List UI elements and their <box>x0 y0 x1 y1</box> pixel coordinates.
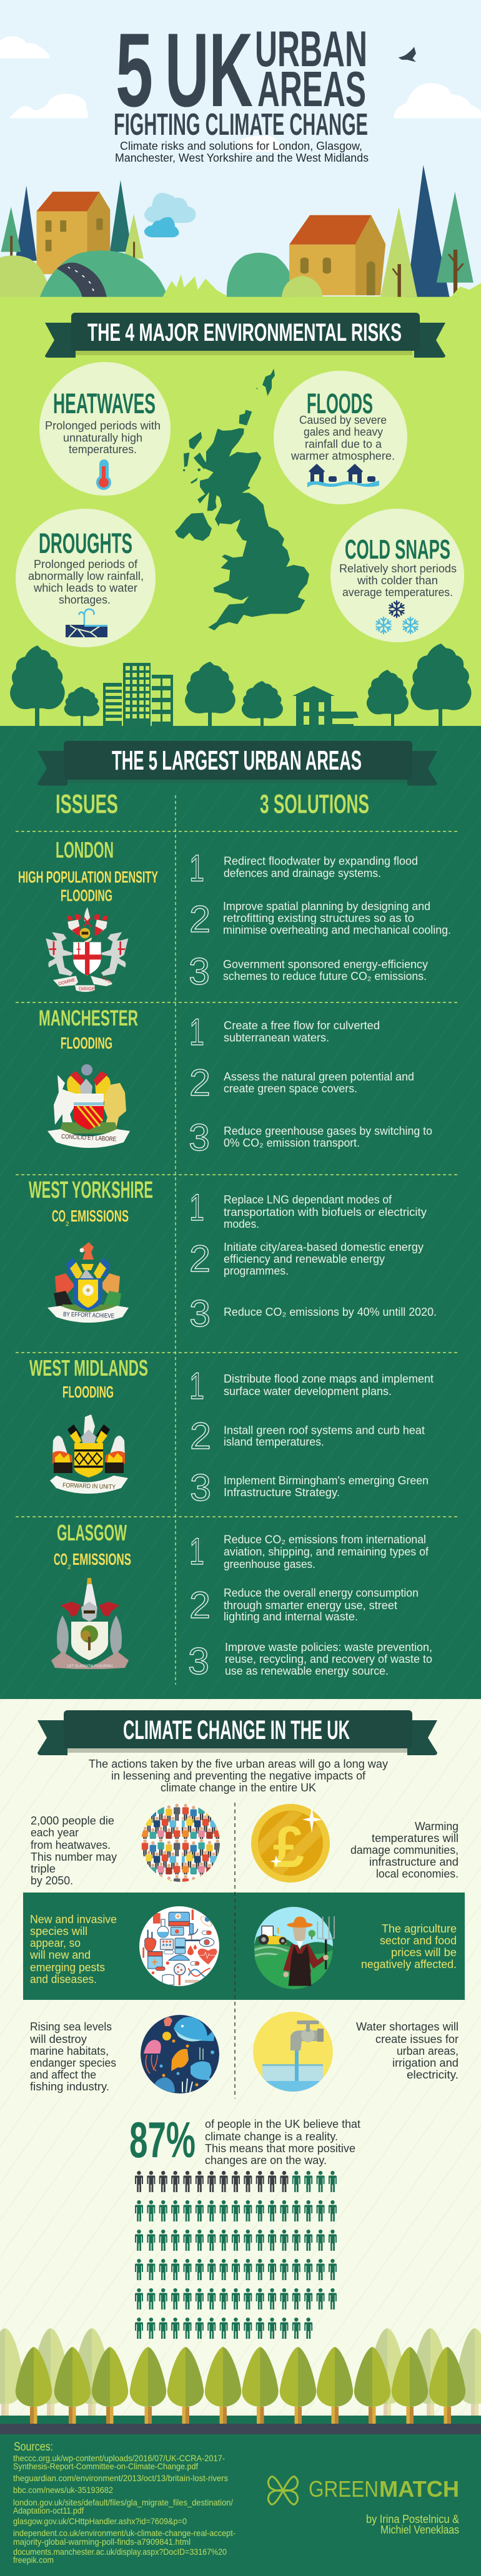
solution 3: West Yorkshire: Reduce CO₂ emissions by 40% untill 2020. <box>224 1306 437 1318</box>
issues: London <box>18 868 158 905</box>
icon: water tap circle <box>253 2012 333 2094</box>
solution 3: West Yorkshire <box>189 1293 437 1335</box>
issue: Manchester: FLOODING <box>61 1034 112 1052</box>
solution 3: West Midlands <box>190 1467 429 1509</box>
issue: Glasgow: EMISSIONS <box>72 1550 131 1569</box>
crest: City of London coat of arms: DIRIGE <box>79 986 95 992</box>
solution 2: West Midlands: island temperatures. <box>224 1436 324 1448</box>
sources list: Synthesis-Report-Committee-on-Climate-Change.pdf <box>13 2461 198 2471</box>
text: rising sea levels: fishing industry. <box>30 2080 109 2093</box>
crest: West Yorkshire coat of arms <box>47 1242 129 1323</box>
solution 1: West Yorkshire: Replace LNG dependant modes of <box>224 1193 392 1206</box>
crest: City of London coat of arms: DOMINE <box>58 977 76 987</box>
icon: flooded houses <box>307 464 379 487</box>
solution 2: London: 2 <box>189 898 211 940</box>
solution 3: London <box>189 951 428 992</box>
text: warming temperatures: temperatures will <box>372 1832 459 1844</box>
text: introduction: The actions taken by the five urban areas will go a long way <box>89 1758 388 1770</box>
solution 2: London: minimise overheating and mechanical cooling. <box>223 924 451 936</box>
solution 1: West Midlands <box>189 1365 434 1407</box>
solution 2: Glasgow: 2 <box>189 1584 211 1626</box>
text: heatwave deaths: from heatwaves. <box>31 1839 111 1851</box>
solution 1: West Yorkshire: transportation with biofuels or electricity <box>224 1206 427 1218</box>
icon: thermometer <box>96 459 111 490</box>
crest: West Yorkshire coat of arms: BY EFFORT ACHIEVE <box>63 1311 115 1320</box>
text: heatwave deaths: 2,000 people die <box>31 1814 114 1827</box>
issue: Glasgow: CO <box>54 1550 67 1569</box>
issue: West Yorkshire: 2 <box>66 1221 69 1228</box>
solution 2: Manchester: Assess the natural green potential and <box>224 1070 414 1083</box>
heading: West Yorkshire: WEST YORKSHIRE <box>29 1177 153 1203</box>
issue: West Yorkshire: CO <box>52 1207 66 1225</box>
text: floods description: gales and heavy <box>304 426 383 438</box>
text: agriculture: The agriculture <box>382 1922 457 1935</box>
solution 1: West Midlands: Distribute flood zone maps and implement <box>224 1373 434 1385</box>
crest: West Midlands coat of arms <box>50 1414 128 1494</box>
ground strip <box>0 2416 481 2424</box>
text: droughts description <box>28 558 144 606</box>
solution 1: Manchester: subterranean waters. <box>224 1032 329 1044</box>
panel: floods <box>274 371 407 504</box>
solution 2: Glasgow: Reduce the overall energy consumption <box>224 1587 419 1599</box>
banner: climate change in the UK <box>37 1710 437 1755</box>
text: floods description: warmer atmosphere. <box>290 449 395 462</box>
solution 3: Glasgow <box>188 1640 432 1682</box>
solution 3: Manchester: Reduce greenhouse gases by switching to <box>224 1125 432 1137</box>
text: floods description: rainfall due to a <box>305 438 382 451</box>
issue: West Yorkshire: EMISSIONS <box>71 1207 129 1225</box>
text: invasive species: emerging pests <box>30 1961 105 1974</box>
text: rising sea levels <box>29 2020 116 2093</box>
issue: West Midlands: FLOODING <box>62 1383 114 1401</box>
subtitle <box>115 140 369 164</box>
background: urban areas section <box>0 726 481 1699</box>
solution 2: Manchester: 2 <box>189 1062 211 1104</box>
text: water shortages: irrigation and <box>392 2057 459 2069</box>
text: water shortages: urban areas, <box>397 2045 459 2057</box>
text: rising sea levels: Rising sea levels <box>30 2020 112 2033</box>
text: warming temperatures: infrastructure and <box>369 1856 459 1868</box>
map of the UK <box>175 369 309 630</box>
text: rising sea levels: marine habitats, <box>30 2045 109 2057</box>
solution 1: West Yorkshire: modes. <box>224 1218 259 1230</box>
icon: pound coin <box>251 1804 331 1883</box>
icon: snowflakes <box>376 601 417 634</box>
solution 3: West Yorkshire: 3 <box>189 1293 211 1335</box>
footer background <box>0 2434 481 2576</box>
solution 2: West Yorkshire <box>189 1238 424 1280</box>
text: introduction: in lessening and preventing the negative impacts of <box>111 1770 366 1782</box>
title <box>114 11 368 142</box>
issue: West Yorkshire <box>52 1207 129 1228</box>
solution 1: Glasgow: aviation, shipping, and remaining types of <box>224 1545 429 1558</box>
solution 2: London <box>189 898 451 940</box>
solution 1: West Midlands: 1 <box>189 1365 204 1407</box>
issues: London: FLOODING <box>61 886 112 905</box>
text: heatwaves description: Prolonged periods with <box>45 419 161 432</box>
credits: Michiel Veneklaas <box>380 2524 459 2536</box>
text: cold snaps description <box>339 562 457 599</box>
icon: marine life circle <box>141 2015 219 2094</box>
sources list: freepik.com <box>13 2555 54 2565</box>
text: agriculture: sector and food <box>380 1934 457 1947</box>
crest: West Midlands coat of arms: FORWARD IN UNITY <box>62 1482 116 1491</box>
solution 2: London: Improve spatial planning by designing and <box>223 900 430 913</box>
solution 2: West Yorkshire: Initiate city/area-based domestic energy <box>224 1241 424 1253</box>
panel: Manchester <box>39 1006 432 1158</box>
solution 3: Manchester: 3 <box>189 1117 210 1158</box>
text: water shortages: create issues for <box>375 2033 459 2045</box>
text: invasive species: species will <box>30 1925 87 1937</box>
solution 3: London: Government sponsored energy-efficiency <box>223 958 428 971</box>
heading: 3 solutions: 3 SOLUTIONS <box>260 789 369 819</box>
solution 3: Manchester: 0% CO₂ emission transport. <box>224 1137 360 1149</box>
panel: heatwaves <box>39 362 171 496</box>
text: 87% explanation: This means that more positive <box>205 2142 355 2155</box>
sources list: majority-global-warming-poll-finds-a7909841.html <box>13 2537 191 2547</box>
panel: Glasgow <box>51 1520 432 1682</box>
crest: Manchester coat of arms: CONCILIO ET LABORE <box>61 1134 117 1143</box>
text: droughts description: shortages. <box>59 594 111 606</box>
logo: GreenMatch: GREEN <box>309 2476 379 2502</box>
text: droughts description: Prolonged periods of <box>34 558 138 571</box>
solution 1: London: Redirect floodwater by expanding flood <box>224 855 418 868</box>
title: AREAS <box>257 61 366 117</box>
solution 1: London: 1 <box>189 848 204 889</box>
text: invasive species: and diseases. <box>30 1973 97 1986</box>
text: invasive species: will new and <box>29 1949 91 1961</box>
solution 3: Glasgow: use as renewable energy source. <box>225 1665 389 1677</box>
solution 1: West Yorkshire <box>189 1187 427 1230</box>
solution 3: West Midlands: Implement Birmingham's emerging Green <box>224 1474 429 1487</box>
background: climate change section <box>0 1699 481 2434</box>
text: cold snaps description: with colder than <box>357 574 438 587</box>
title: UK <box>165 11 253 129</box>
solution 3: Glasgow: Improve waste policies: waste prevention, <box>225 1641 432 1653</box>
icon: pound coin: £ <box>273 1814 304 1879</box>
text: invasive species <box>29 1913 117 1986</box>
text: invasive species: appear, so <box>30 1937 81 1949</box>
panel: green band <box>23 1893 465 2000</box>
solution 2: West Midlands: 2 <box>190 1415 211 1457</box>
crest: City of London coat of arms <box>46 907 128 992</box>
text: rising sea levels: and affect the <box>30 2069 96 2081</box>
solution 2: Glasgow: through smarter energy use, street <box>224 1599 397 1612</box>
solution 2: West Yorkshire: 2 <box>189 1238 211 1280</box>
heading: floods: FLOODS <box>307 388 373 419</box>
solution 3: West Midlands: 3 <box>190 1467 211 1509</box>
solution 2: Manchester <box>189 1062 414 1104</box>
text: introduction: climate change in the entire UK <box>161 1781 316 1794</box>
sources list: theguardian.com/environment/2013/oct/13/britain-lost-rivers <box>13 2473 228 2483</box>
banner: the 5 largest urban areas <box>37 741 437 786</box>
solution 1: Glasgow: 1 <box>189 1530 204 1572</box>
illustration: foreground tree row <box>16 2347 465 2424</box>
solution 2: West Midlands: Install green roof systems and curb heat <box>224 1424 425 1437</box>
crest: Manchester coat of arms <box>47 1064 130 1148</box>
panel: cold snaps <box>330 509 464 642</box>
solution 2: West Yorkshire: efficiency and renewable energy <box>224 1253 385 1265</box>
heading: West Midlands: WEST MIDLANDS <box>29 1355 148 1381</box>
tree and building skyline <box>10 644 472 727</box>
text: 87% explanation: changes are on the way. <box>205 2154 327 2167</box>
icon: farmer circle <box>254 1907 334 1989</box>
background: sky <box>0 0 481 297</box>
sources list: Adaptation-oct11.pdf <box>13 2505 84 2515</box>
solution 1: Glasgow: greenhouse gases. <box>224 1558 315 1570</box>
illustration: background tree row <box>0 2328 481 2416</box>
subtitle: Manchester, West Yorkshire and the West Midlands <box>115 152 369 164</box>
solution 3: Glasgow: reuse, recycling, and recovery of waste to <box>225 1653 432 1665</box>
text: rising sea levels: will destroy <box>29 2033 87 2045</box>
solution 1: London <box>189 848 418 889</box>
solution 3: Manchester <box>189 1117 432 1158</box>
solution 2: Manchester: create green space covers. <box>224 1082 357 1095</box>
solution 3: Glasgow: 3 <box>188 1640 209 1682</box>
text: agriculture: prices will be <box>391 1946 457 1959</box>
panel: London <box>18 837 451 992</box>
text: heatwave deaths <box>31 1814 117 1887</box>
sources list: theccc.org.uk/wp-content/uploads/2016/07/UK-CCRA-2017- <box>13 2453 225 2463</box>
icon: wilting plant on cracked soil <box>66 609 107 637</box>
text: droughts description: which leads to water <box>33 582 137 594</box>
sources list: london.gov.uk/sites/default/files/gla_migrate_files_destination/ <box>13 2497 233 2507</box>
text: water shortages: Water shortages will <box>356 2020 459 2033</box>
panel: West Midlands <box>29 1355 434 1509</box>
solution 3: London: 3 <box>189 951 210 992</box>
text: 87% explanation: of people in the UK believe that <box>205 2118 360 2130</box>
issue: Glasgow: 2 <box>67 1564 71 1570</box>
text: droughts description: abnormally low rainfall, <box>28 570 144 582</box>
text: floods description: Caused by severe <box>299 414 387 426</box>
text: heatwave deaths: by 2050. <box>31 1874 73 1887</box>
text: heatwaves description: unnaturally high <box>63 432 142 444</box>
solution 3: West Midlands: Infrastructure Strategy. <box>224 1486 340 1499</box>
heading: sources: Sources: <box>14 2441 53 2454</box>
text: cold snaps description: Relatively short periods <box>339 562 457 575</box>
text: introduction <box>89 1758 388 1794</box>
statistic: 87%: 87% <box>129 2112 196 2168</box>
illustration: village scene with clouds, houses and trees <box>0 36 481 297</box>
title: URBAN <box>255 21 367 77</box>
text: warming temperatures: damage communities, <box>350 1844 459 1856</box>
solution 2: West Midlands <box>190 1415 425 1457</box>
credits: by Irina Postelnicu & <box>366 2513 459 2525</box>
solution 2: West Yorkshire: programmes. <box>224 1265 289 1277</box>
crest: Glasgow coat of arms <box>51 1578 129 1669</box>
text: agriculture: negatively affected. <box>361 1958 457 1971</box>
solution 1: West Yorkshire: 1 <box>189 1187 204 1228</box>
banner: the 4 major environmental risks <box>45 313 445 358</box>
text: heatwaves description <box>45 419 161 456</box>
heading: London: LONDON <box>56 837 114 863</box>
text: floods description <box>290 414 395 462</box>
text: heatwave deaths: each year <box>31 1826 79 1839</box>
icon: medical pattern circle <box>139 1906 220 1987</box>
road strip <box>0 2424 481 2434</box>
solution 1: London: defences and drainage systems. <box>224 867 381 879</box>
panel: droughts <box>16 509 156 647</box>
text: water shortages <box>356 2020 459 2081</box>
heading: issues: ISSUES <box>56 789 118 819</box>
text: rising sea levels: endanger species <box>30 2057 116 2069</box>
solution 3: London: schemes to reduce future CO₂ emissions. <box>223 970 427 982</box>
crest: Glasgow coat of arms: LET GLASGOW FLOURISH <box>67 1665 112 1668</box>
text: invasive species: New and invasive <box>30 1913 117 1926</box>
issue: Glasgow <box>54 1550 131 1570</box>
solution 2: Glasgow: lighting and internal waste. <box>224 1610 358 1623</box>
logo: GreenMatch <box>268 2476 459 2504</box>
sources list: glasgow.gov.uk/CHttpHandler.ashx?id=7609&p=0 <box>13 2516 187 2526</box>
solution 1: Manchester <box>189 1011 380 1053</box>
sources list: documents.manchester.ac.uk/display.aspx?DocID=33167%20 <box>13 2547 227 2557</box>
heading: heatwaves: HEATWAVES <box>53 388 156 419</box>
text: water shortages: electricity. <box>407 2069 459 2081</box>
solution 1: Glasgow: Reduce CO₂ emissions from international <box>224 1533 426 1545</box>
sources list: bbc.com/news/uk-35193682 <box>13 2485 113 2495</box>
text: 87% explanation: climate change is a reality. <box>205 2130 338 2143</box>
solution 1: Glasgow <box>189 1530 429 1572</box>
text: warming temperatures: Warming <box>415 1820 459 1833</box>
title: 5 <box>116 11 153 129</box>
text: heatwaves description: temperatures. <box>69 443 137 456</box>
credits <box>366 2513 459 2536</box>
text: cold snaps description: average temperatures. <box>342 586 453 599</box>
icon: clover <box>268 2477 298 2504</box>
solution 1: Manchester: 1 <box>189 1011 204 1053</box>
chart: 100 person pictogram <box>135 2171 337 2339</box>
icon: crowd of people circle <box>141 1803 220 1882</box>
text: agriculture <box>361 1922 457 1971</box>
logo: GreenMatch: MATCH <box>379 2476 459 2502</box>
background: lime ground <box>0 296 481 727</box>
issues: London: HIGH POPULATION DENSITY <box>18 868 158 886</box>
solution 1: Manchester: Create a free flow for culverted <box>224 1019 380 1032</box>
crest: City of London coat of arms: NOS <box>101 974 112 984</box>
solution 1: West Midlands: surface water development plans. <box>224 1385 392 1398</box>
solution 2: Glasgow <box>189 1584 419 1626</box>
heading: droughts: DROUGHTS <box>39 527 132 559</box>
heading: Manchester: MANCHESTER <box>39 1006 138 1031</box>
sources list <box>13 2441 236 2565</box>
subtitle: Climate risks and solutions for London, Glasgow, <box>120 140 362 152</box>
text: warming temperatures <box>350 1820 459 1880</box>
text: heatwave deaths: triple <box>31 1863 56 1875</box>
heading: Glasgow: GLASGOW <box>57 1520 127 1545</box>
panel: West Yorkshire <box>29 1177 437 1335</box>
text: 87% explanation <box>205 2118 360 2167</box>
sources list: independent.co.uk/environment/uk-climate-change-real-accept- <box>13 2528 236 2538</box>
solution 2: London: retrofitting existing structures so as to <box>223 912 414 924</box>
text: warming temperatures: local economies. <box>376 1868 459 1880</box>
text: heatwave deaths: This number may <box>31 1851 117 1863</box>
